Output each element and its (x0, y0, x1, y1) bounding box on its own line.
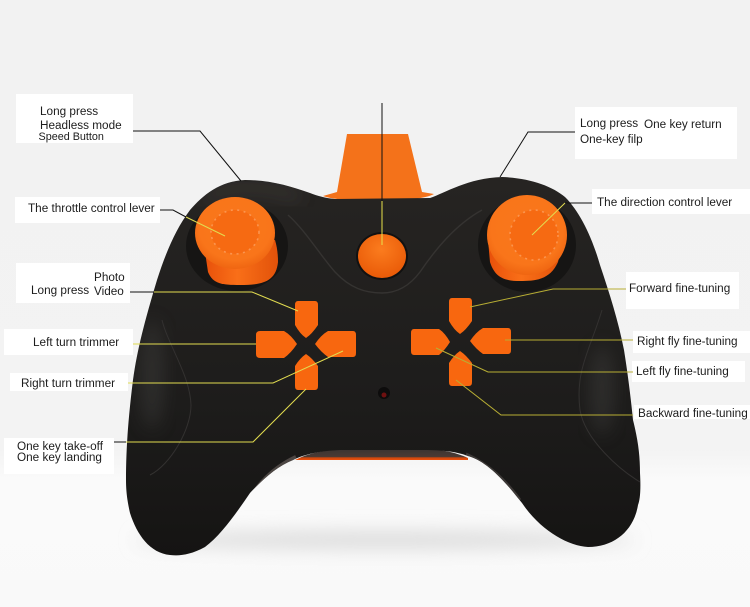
infographic: controller diagram (4, 94, 750, 556)
controller body (126, 177, 640, 555)
label: one key take-off and landing: One key landing (17, 451, 102, 464)
label: long press headless mode speed button: Long press (40, 105, 98, 118)
label: one key return and flip: One key return (644, 118, 722, 131)
label: one key take-off and landing: One key take-off (17, 440, 104, 453)
label: photo and video: Video (94, 285, 124, 298)
callout lines: black segments (114, 103, 592, 442)
label: one key return and flip (580, 117, 722, 146)
body highlights (140, 188, 640, 545)
label: long press headless mode speed button: Headless mode (40, 119, 122, 132)
label: photo and video: Photo (94, 271, 125, 284)
icon: left throttle stick (186, 197, 288, 291)
icon: right d-pad (411, 298, 511, 386)
label: forward fine-tuning: Forward fine-tuning (629, 282, 730, 295)
label: long press headless mode speed button: Speed Button (38, 131, 104, 143)
label: left turn trimmer: Left turn trimmer (33, 336, 119, 349)
label: right turn trimmer: Right turn trimmer (21, 377, 115, 390)
orange bottom strip (295, 449, 468, 460)
label: one key return and flip: Long press (580, 117, 638, 130)
icon: right direction stick (478, 195, 576, 292)
label: photo and video: Long press (31, 284, 89, 297)
label: left fly fine-tuning: Left fly fine-tuning (636, 365, 729, 378)
label: one key return and flip: One-key filp (580, 133, 643, 146)
floor shadow (135, 531, 635, 549)
callout lines: yellow segments (126, 201, 633, 442)
icon: orange antenna fin (323, 134, 434, 201)
icon: left d-pad (256, 301, 356, 390)
label: photo and video (31, 271, 125, 298)
label: right fly fine-tuning: Right fly fine-tuning (637, 335, 738, 348)
icon: indicator led (378, 387, 390, 399)
label: direction control lever: The direction control lever (597, 196, 732, 209)
label: backward fine-tuning: Backward fine-tuning (638, 407, 748, 420)
label backgrounds (4, 94, 750, 474)
label: one key take-off and landing (17, 440, 104, 464)
label: throttle control lever: The throttle control lever (28, 202, 155, 215)
label: long press headless mode speed button (38, 105, 122, 143)
icon: centre button (356, 232, 408, 280)
